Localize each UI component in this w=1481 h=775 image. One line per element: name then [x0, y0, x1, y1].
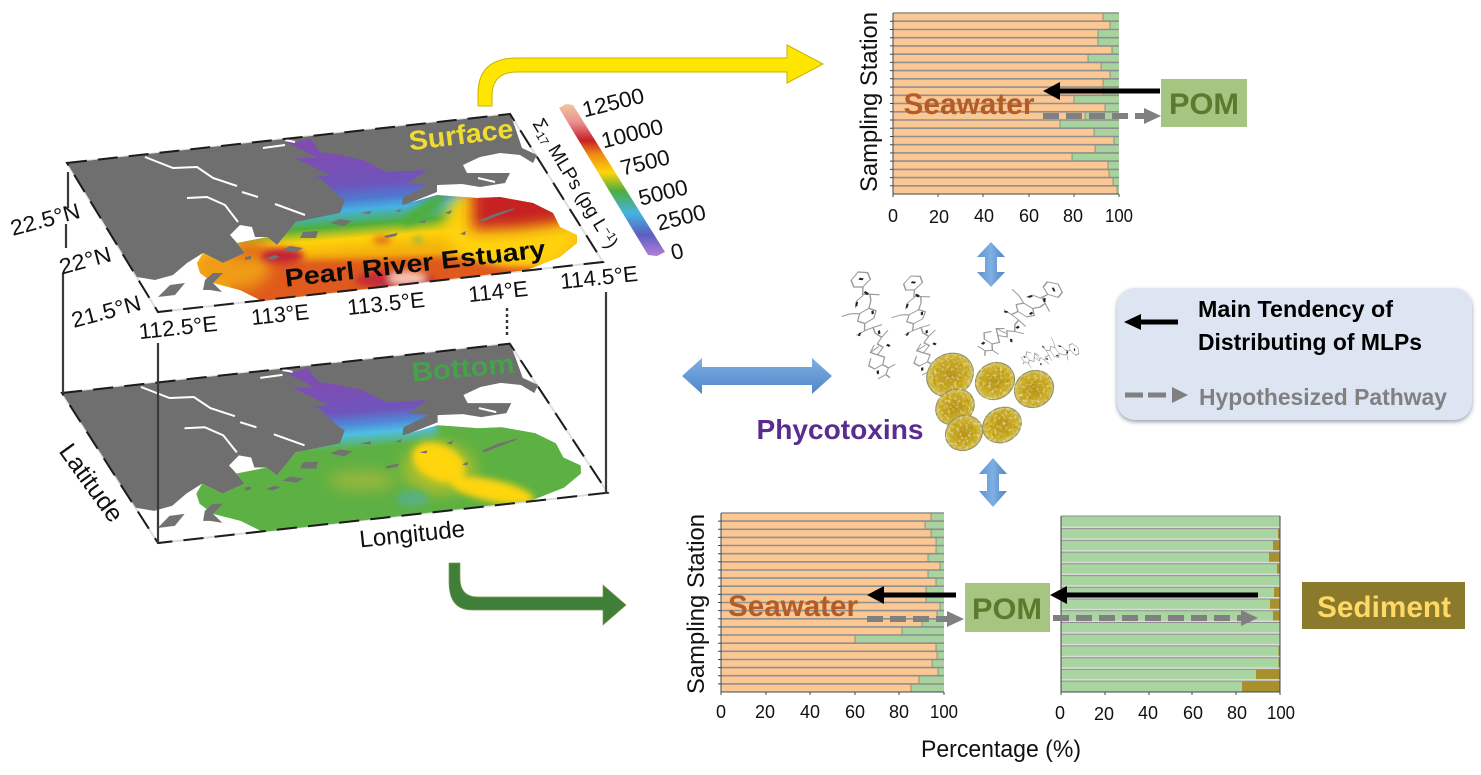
axes [890, 13, 1119, 197]
x tick labels: 60 [845, 702, 865, 722]
x tick labels: 100 [1267, 703, 1295, 723]
box frame vertical lines [63, 172, 606, 543]
colour ramp [559, 104, 665, 256]
arrow: blue vertical upper double [977, 242, 1005, 287]
colour bar tick labels: 12500 [580, 83, 647, 122]
arrow: hypothesized seawater to POM [867, 611, 964, 627]
x tick labels: 0 [1055, 703, 1065, 723]
label: Bottom: Bottom [410, 349, 516, 387]
colour bar tick labels: 5000 [636, 174, 690, 211]
box: POM top: POM [1169, 88, 1239, 121]
x tick labels [888, 206, 1133, 227]
longitude tick labels: 114°E [467, 276, 529, 307]
rivers: surface [145, 140, 510, 222]
y axis title: Sampling Station [683, 514, 710, 694]
land: surface [67, 114, 537, 280]
arrow: hypothesized top [1043, 108, 1161, 124]
bar separators [893, 13, 1119, 186]
box: POM bottom: POM [972, 593, 1042, 626]
sediment share background [1061, 516, 1280, 692]
POM share bars [1061, 516, 1280, 692]
concentration heat map: bottom [196, 368, 581, 532]
colour bar tick labels: 7500 [618, 144, 672, 181]
bar separators [1061, 528, 1280, 680]
arrow: green bottom to seawater [449, 563, 626, 625]
x tick labels: 40 [974, 206, 994, 226]
plane edge base line: bottom [61, 344, 609, 543]
axes [718, 513, 944, 695]
colour bar tick labels: 0 [668, 238, 686, 265]
axis title: Latitude: Latitude [53, 438, 129, 528]
colour bar title: Σ [528, 115, 552, 136]
dashed plane outline: bottom [61, 344, 609, 543]
top labels and arrows [904, 79, 1247, 127]
seawater share bars [893, 13, 1117, 194]
y axis title: Sampling Station [856, 12, 883, 192]
x tick labels: 100 [1105, 206, 1133, 226]
bar separators [721, 513, 944, 684]
islands: surface [158, 208, 515, 297]
concentration heat map: surface [197, 138, 577, 301]
colour bar title: −1 [600, 224, 619, 243]
x tick labels: 20 [929, 207, 949, 227]
x tick labels: 40 [1138, 703, 1158, 723]
x tick labels: 80 [889, 702, 909, 722]
rivers: bottom [140, 370, 512, 452]
longitude tick labels: 114.5°E [559, 261, 639, 294]
label: Pearl River Estuary: Pearl River Estuary [283, 235, 547, 293]
label: Seawater bottom: Seawater [728, 590, 858, 623]
x tick labels [1055, 703, 1295, 724]
icon: dinoflagellate cells [919, 345, 1060, 457]
dashed plane outline: surface [67, 114, 603, 312]
arrow: main tendency POM to seawater [867, 586, 956, 604]
box: Sediment: Sediment [1317, 591, 1451, 624]
bottom left chart: seawater versus POM [683, 513, 958, 722]
colour bar tick labels [580, 83, 708, 265]
surface map plane [67, 114, 603, 312]
box: POM bottom [965, 583, 1050, 632]
colour bar tick labels: 10000 [599, 114, 666, 153]
arrow: blue vertical lower double [979, 458, 1007, 507]
bar separator shadows [1061, 516, 1280, 681]
box: POM top [1161, 79, 1247, 127]
legend panel [1117, 288, 1472, 420]
arrow: blue horizontal double [682, 358, 832, 394]
arrow: legend hypothesized pathway [1125, 387, 1188, 403]
longitude tick labels: 112.5°E [137, 311, 219, 344]
icon: phycotoxin molecules [821, 264, 1081, 386]
longitude tick labels: 113°E [250, 299, 310, 330]
label: Phycotoxins: Phycotoxins [756, 414, 924, 445]
POM share background [893, 13, 1119, 194]
plane edge base line: surface [67, 114, 603, 312]
colour bar tick labels: 2500 [654, 199, 708, 236]
axis title: Longitude: Longitude [358, 516, 466, 553]
longitude tick labels: 113.5°E [346, 287, 426, 320]
x tick labels: 100 [930, 702, 958, 722]
legend text: hypothesized pathway: Hypothesized Pathway [1199, 384, 1447, 410]
box: Sediment [1302, 582, 1465, 629]
bottom labels and arrows [728, 582, 1465, 632]
x tick labels: 40 [800, 702, 820, 722]
latitude tick labels: 22°N [56, 242, 114, 279]
POM share background [721, 513, 944, 692]
label: Seawater top: Seawater [904, 88, 1035, 121]
x tick labels: 20 [755, 702, 775, 722]
x tick labels: 0 [888, 206, 898, 226]
arrow: yellow surface to seawater [478, 45, 823, 106]
x tick labels: 80 [1063, 206, 1083, 226]
land: bottom [61, 344, 541, 511]
longitude tick labels [137, 261, 639, 344]
x tick labels: 20 [1094, 704, 1114, 724]
x tick labels: 0 [716, 702, 726, 722]
latitude tick labels: 21.5°N [69, 290, 144, 333]
colour bar [527, 83, 708, 265]
legend text: main tendency: Main Tendency of [1198, 296, 1393, 322]
top chart: seawater versus POM [856, 12, 1133, 227]
legend background [1117, 288, 1472, 420]
arrow: main tendency sediment to POM [1050, 586, 1258, 604]
bottom right chart: POM versus sediment [1055, 516, 1295, 724]
x tick labels [716, 702, 958, 722]
axes [1061, 516, 1280, 695]
x axis title: Percentage: Percentage (%) [921, 736, 1081, 763]
bottom map plane [61, 344, 609, 543]
seawater share bars [721, 513, 940, 692]
latitude tick labels [8, 198, 144, 333]
colour bar title: ) [600, 236, 622, 252]
arrow: legend main tendency [1124, 314, 1178, 330]
latitude tick labels: 22.5°N [8, 198, 83, 241]
colour bar title: MLPs (pg L [541, 137, 611, 235]
x tick labels: 80 [1227, 703, 1247, 723]
legend text: main tendency: Distributing of MLPs [1198, 329, 1422, 355]
arrow: hypothesized POM to sediment [1053, 610, 1258, 626]
label: Surface: Surface [407, 114, 515, 156]
x tick labels: 60 [1019, 206, 1039, 226]
arrow: main tendency top [1043, 82, 1160, 100]
colour bar title: 17 [533, 129, 552, 148]
x tick labels: 60 [1183, 703, 1203, 723]
dotted vertical line [506, 308, 508, 338]
islands: bottom [155, 438, 519, 528]
